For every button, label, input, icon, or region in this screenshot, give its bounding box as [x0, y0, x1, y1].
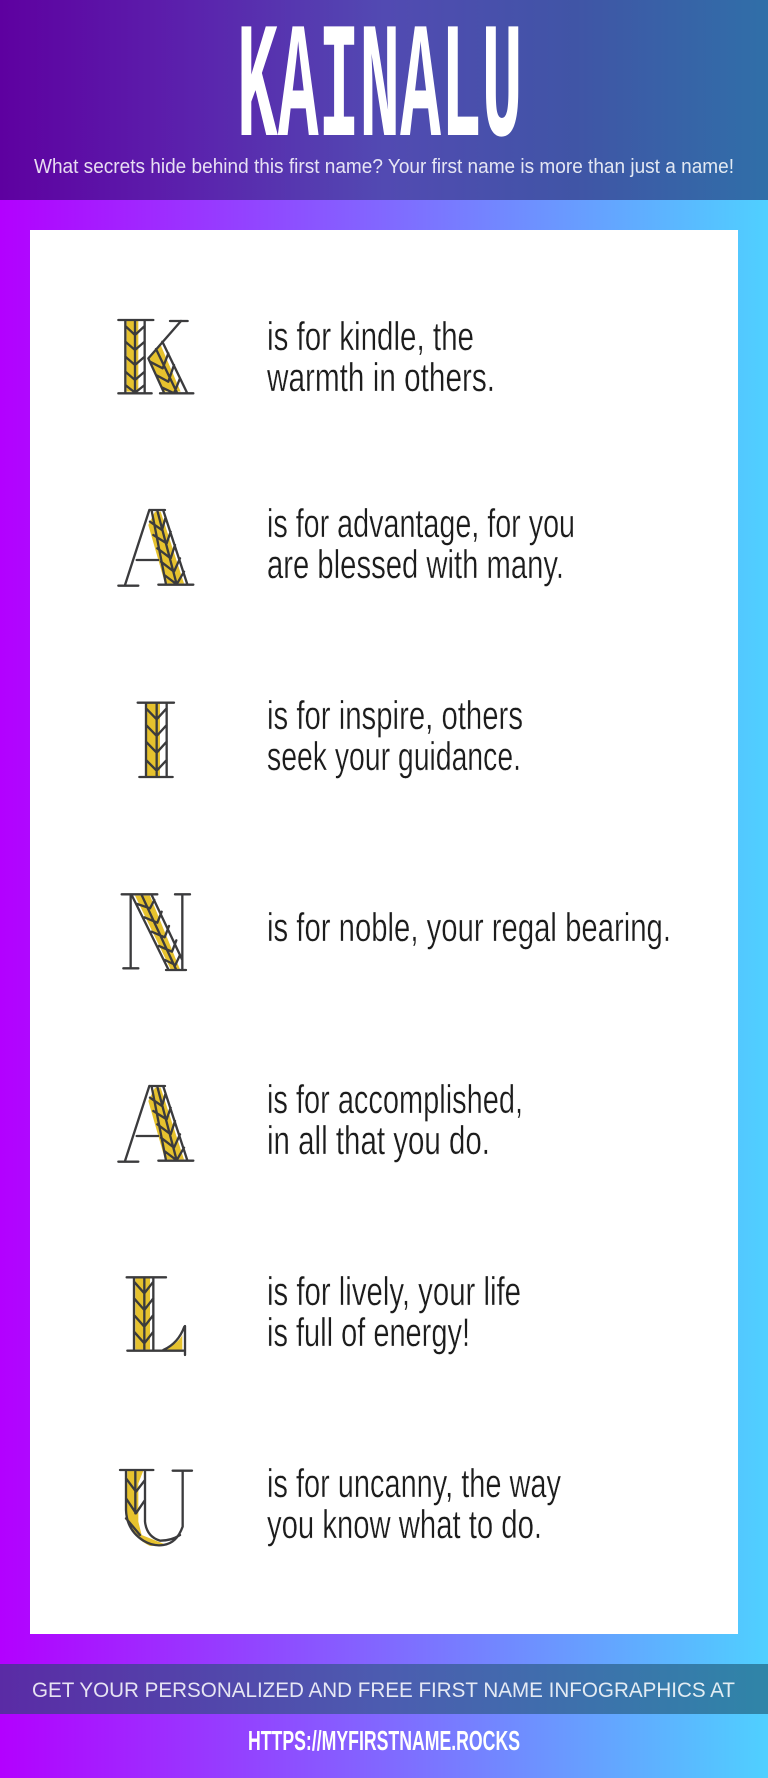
icon: letter L [127, 1277, 185, 1355]
text: U line: you know what to do. [267, 1503, 542, 1547]
title: KAINALU [237, 0, 523, 185]
panel: white card [30, 230, 738, 1634]
icon: letter U [120, 1470, 192, 1546]
text: A line: is for advantage, for you [267, 502, 575, 546]
text: A line: in all that you do. [267, 1119, 490, 1163]
footer band [0, 1664, 768, 1714]
text: I line: is for inspire, others [267, 694, 523, 738]
icon: letter K [118, 320, 193, 393]
header band [0, 0, 768, 200]
text: U line [267, 1462, 561, 1547]
text: A line [267, 1078, 523, 1163]
text: L line [267, 1270, 521, 1355]
icon: letter I [138, 703, 174, 777]
text: K line: warmth in others. [266, 356, 495, 400]
footer url: HTTPS://MYFIRSTNAME.ROCKS [248, 1725, 520, 1756]
text: I line: seek your guidance. [267, 735, 521, 779]
text: A line: are blessed with many. [267, 543, 564, 587]
icon: letter N [122, 894, 190, 970]
footer text: GET YOUR PERSONALIZED AND FREE FIRST NAME INFOGRAPHICS AT [32, 1679, 735, 1702]
text: K line: is for kindle, the [267, 315, 474, 359]
icon: letter A [118, 1086, 193, 1162]
text: L line: is full of energy! [267, 1311, 470, 1355]
text: A line: is for accomplished, [267, 1078, 523, 1122]
subtitle: What secrets hide behind this first name? Your first name is more than just a name! [34, 156, 734, 178]
text: I line [267, 694, 523, 779]
text: U line: is for uncanny, the way [267, 1462, 561, 1506]
text: K line [266, 315, 495, 400]
icon: letter A [118, 510, 193, 586]
text: A line [267, 502, 575, 587]
text: L line: is for lively, your life [267, 1270, 521, 1314]
